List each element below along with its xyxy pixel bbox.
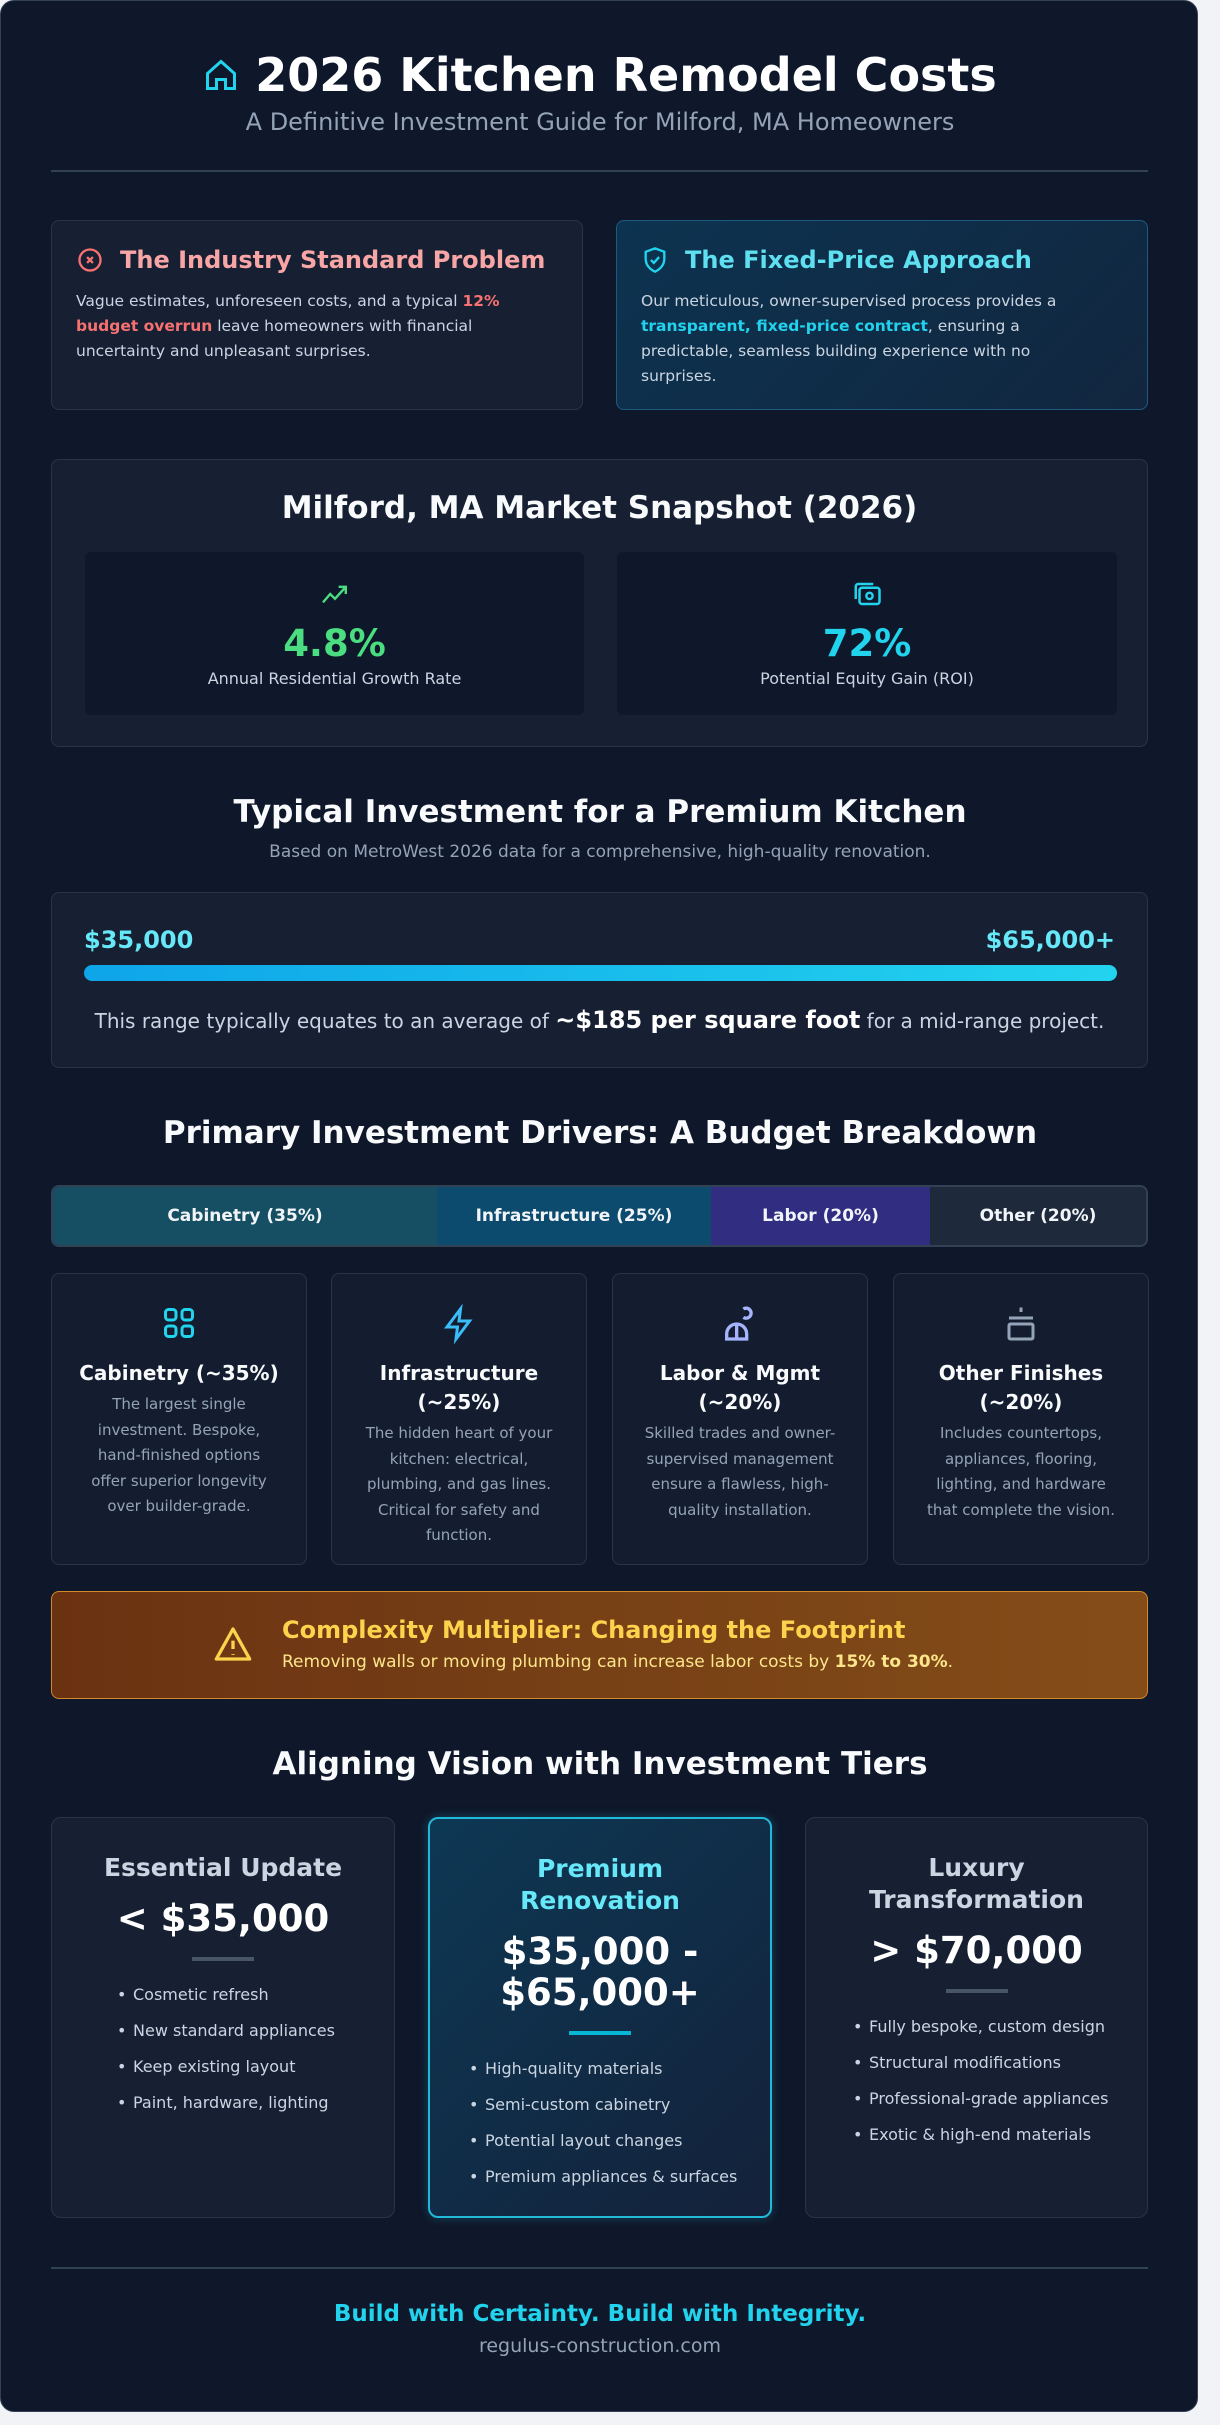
stacked bar: Infrastructure (25%) [476, 1206, 672, 1226]
card: infrastructure [331, 1273, 587, 1565]
footer: regulus-construction.com [479, 2335, 721, 2357]
heading: tiers: Aligning Vision with Investment Tiers [272, 1746, 928, 1782]
card: cabinetry: Cabinetry (~35%) [79, 1361, 279, 1385]
subheading: Based on MetroWest 2026 data for a comprehensive, high-quality renovation. [269, 842, 931, 862]
tier: essential: Paint, hardware, lighting [133, 2093, 328, 2112]
tier: essential: < $35,000 [117, 1897, 329, 1940]
stacked bar: Other (20%) [980, 1206, 1096, 1226]
card: cabinetry: The largest single investment. Bespoke, hand-finished options offer superior longevity over builder-grade. [91, 1395, 267, 1515]
subtitle: A Definitive Investment Guide for Milford, MA Homeowners [246, 108, 954, 136]
tier: essential: Keep existing layout [133, 2057, 295, 2076]
card: other: Other Finishes [939, 1361, 1103, 1385]
tier: luxury: Professional-grade appliances [869, 2089, 1108, 2108]
tier: essential [51, 1817, 395, 2218]
tier: premium: $35,000 - [502, 1930, 698, 1973]
panel: fixed price [616, 220, 1148, 410]
heading: drivers: Primary Investment Drivers: A Budget Breakdown [163, 1115, 1037, 1151]
stat: roi: Potential Equity Gain (ROI) [760, 669, 974, 688]
tier: luxury [805, 1817, 1148, 2218]
card: other: Includes countertops, appliances, flooring, lighting, and hardware that complete the vision. [927, 1424, 1115, 1518]
tier: essential: Cosmetic refresh [133, 1985, 269, 2004]
tier: luxury: Exotic & high-end materials [869, 2125, 1091, 2144]
tier: luxury: > $70,000 [870, 1929, 1083, 1972]
callout: complexity multiplier [51, 1591, 1148, 1699]
panel: market snapshot [51, 459, 1148, 747]
footer: Build with Certainty. Build with Integrity. [334, 2301, 866, 2327]
card: other: (~20%) [980, 1390, 1062, 1414]
tier: luxury: Structural modifications [869, 2053, 1061, 2072]
card: infrastructure: (~25%) [418, 1390, 500, 1414]
tier: premium: $65,000+ [500, 1971, 700, 2014]
icon: warning [214, 1627, 252, 1661]
tier: essential: Essential Update [104, 1853, 342, 1882]
tier: premium [428, 1817, 772, 2218]
card: infrastructure: The hidden heart of your kitchen: electrical, plumbing, and gas lines. Critical for safety and function. [366, 1424, 552, 1544]
tier: luxury: Transformation [869, 1885, 1084, 1914]
panel: problem [51, 220, 583, 410]
tier: luxury: Luxury [928, 1853, 1025, 1882]
stacked bar [51, 1185, 1148, 1247]
heading: snapshot: Milford, MA Market Snapshot (2026) [282, 490, 917, 526]
stacked bar: Labor (20%) [762, 1206, 879, 1226]
card: labor: (~20%) [699, 1390, 781, 1414]
icon: trend [322, 586, 347, 604]
card: other [893, 1273, 1149, 1565]
stat: roi: 72% [823, 622, 911, 665]
heading: problem: The Industry Standard Problem [120, 246, 545, 274]
title: 2026 Kitchen Remodel Costs [255, 48, 997, 102]
tier: luxury: Fully bespoke, custom design [869, 2017, 1105, 2036]
footer [334, 2301, 866, 2357]
tier: premium: Semi-custom cabinetry [485, 2095, 670, 2114]
tier: premium: Premium appliances & surfaces [485, 2167, 737, 2186]
panel: range [51, 892, 1148, 1068]
stat: growth: Annual Residential Growth Rate [208, 669, 461, 688]
heading: typical investment: Typical Investment for a Premium Kitchen [233, 794, 967, 830]
callout: complexity multiplier: Complexity Multiplier: Changing the Footprint [282, 1616, 905, 1644]
range bar [84, 965, 1117, 981]
card: infrastructure: Infrastructure [380, 1361, 538, 1385]
stat: growth [85, 552, 584, 715]
card: labor [612, 1273, 868, 1565]
tier: premium: Renovation [520, 1886, 680, 1915]
stat: roi [617, 552, 1117, 715]
range note: This range typically equates to an average of ~$185 per square foot for a mid-range project. [95, 1006, 1104, 1034]
stacked bar: Cabinetry (35%) [167, 1206, 323, 1226]
tier: premium: High-quality materials [485, 2059, 662, 2078]
text: problem: Vague estimates, unforeseen costs, and a typical 12% budget overrun leave homeowners with financial uncertainty and unpleasant surprises. [76, 292, 500, 360]
header [206, 48, 997, 136]
card: labor: Skilled trades and owner-supervised management ensure a flawless, high-quality installation. [645, 1424, 835, 1518]
text: fixed price: Our meticulous, owner-supervised process provides a transparent, fixed-price contract, ensuring a predictable, seamless building experience with no surprises. [641, 292, 1056, 385]
card: cabinetry [51, 1273, 307, 1565]
icon: money [854, 582, 881, 606]
panel: range: $35,000 [84, 926, 193, 954]
callout: complexity multiplier: Removing walls or moving plumbing can increase labor costs by 15% to 30%. [282, 1652, 953, 1672]
card: labor: Labor & Mgmt [660, 1361, 820, 1385]
tier: premium: Premium [537, 1854, 663, 1883]
stat: growth: 4.8% [283, 622, 386, 665]
tier: premium: Potential layout changes [485, 2131, 682, 2150]
panel: range: $65,000+ [986, 926, 1115, 954]
heading: fixed price: The Fixed-Price Approach [685, 246, 1032, 274]
tier: essential: New standard appliances [133, 2021, 335, 2040]
